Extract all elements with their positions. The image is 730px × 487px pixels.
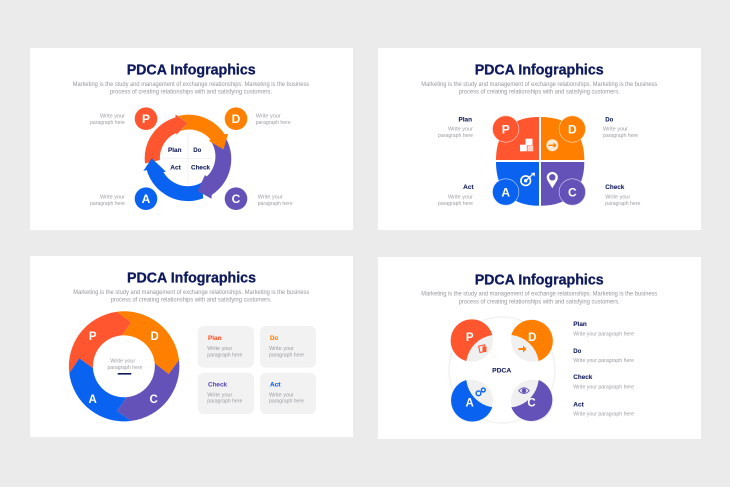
card: plan [198, 326, 254, 368]
petal: act [451, 380, 493, 422]
card: act [260, 373, 316, 414]
ring of four arrows [143, 114, 231, 201]
badge: P: P [142, 112, 150, 126]
card: plan: paragraph here [207, 352, 242, 358]
icon: eye [519, 388, 529, 394]
icon: gears [476, 388, 485, 396]
list item: plan: Write your paragraph here [573, 331, 634, 337]
text: act note: paragraph here [90, 201, 125, 207]
petal: check [511, 380, 553, 422]
petal: do: D [528, 332, 536, 344]
intro text [421, 291, 657, 305]
badge: D: D [568, 122, 577, 136]
donut segment: act [69, 358, 131, 421]
card: plan: Write your [207, 346, 232, 352]
badge: C [559, 179, 586, 205]
petal: plan: P [466, 332, 474, 344]
text: act note: Write your [100, 195, 125, 201]
panel: four petals around PDCA [378, 257, 701, 439]
icon: arrow [518, 346, 526, 352]
centre label: PDCA [492, 367, 512, 374]
list item: act: Write your paragraph here [573, 411, 634, 417]
intro text: process of creating relationships with and satisfying customers. [459, 88, 620, 95]
text: plan note [90, 114, 125, 126]
inner labels: Do [193, 147, 201, 154]
text: check note: Write your [258, 195, 283, 201]
text: do note [256, 113, 291, 126]
badge: P [492, 116, 519, 142]
badge: D [225, 107, 247, 130]
panel: circular arrows cycle [30, 48, 353, 230]
heading: PDCA Infographics [475, 62, 604, 79]
heading: PDCA Infographics [127, 62, 256, 79]
icon: target [521, 173, 535, 186]
label: check: Write your [605, 195, 630, 201]
donut letters: C [150, 394, 158, 406]
icon: documents [479, 345, 486, 352]
icon: location pin [547, 172, 558, 188]
list item: plan [573, 321, 634, 337]
badge: C [225, 187, 247, 210]
label: act [438, 184, 475, 207]
text: do note: Write your [256, 113, 281, 119]
label: act: paragraph here [438, 201, 473, 207]
card: plan: Plan [208, 335, 222, 342]
list item: do: Write your paragraph here [573, 358, 634, 364]
label: do [603, 116, 638, 139]
intro text [73, 81, 309, 95]
list item: do: Do [573, 348, 581, 355]
badge: D [559, 116, 586, 142]
intro text: Marketing is the study and management of exchange relationships. Marketing is the business [421, 81, 657, 88]
card: do [260, 326, 316, 368]
quadrant: plan [496, 117, 539, 160]
intro text: process of creating relationships with and satisfying customers. [459, 298, 620, 305]
petal: plan [451, 319, 493, 362]
list item: act: Act [573, 401, 585, 408]
label: act: Write your [448, 195, 473, 201]
intro text: process of creating relationships with and satisfying customers. [111, 296, 272, 303]
badge: C: C [568, 185, 577, 199]
intro text: Marketing is the study and management of exchange relationships. Marketing is the business [73, 81, 309, 88]
intro text: Marketing is the study and management of exchange relationships. Marketing is the business [73, 289, 309, 296]
list item: do [573, 348, 634, 364]
card: act: Write your [269, 392, 294, 398]
inner labels: Act [170, 165, 182, 172]
donut centre note [108, 359, 142, 375]
badge: C: C [232, 192, 241, 206]
donut segment: do [117, 311, 179, 374]
badge: A: A [501, 185, 510, 199]
panel: four quadrant rounded square [378, 48, 701, 230]
petal: do [511, 319, 554, 362]
donut segment: plan [69, 312, 131, 373]
label: plan: Write your [448, 127, 473, 133]
icon: arrow in circle [546, 139, 558, 151]
donut centre note: paragraph here [108, 365, 142, 371]
list item: check: Write your paragraph here [573, 384, 634, 390]
text: check note [258, 195, 293, 207]
badge: P: P [502, 122, 510, 136]
outer ring [449, 317, 555, 423]
label: check: Check [605, 184, 625, 191]
badge: A [135, 187, 157, 210]
list item: check [573, 374, 634, 390]
label: act: Act [463, 184, 475, 191]
inner labels [168, 147, 210, 172]
card: check: Check [208, 381, 227, 388]
label: do: Do [605, 116, 613, 124]
card: check: paragraph here [207, 399, 242, 405]
intro text [421, 81, 657, 95]
donut segment: check [117, 360, 179, 421]
donut letters: A [89, 394, 97, 406]
label: check: paragraph here [605, 201, 640, 207]
heading: PDCA Infographics [475, 271, 604, 288]
label: plan [438, 116, 473, 139]
badge: P [135, 107, 157, 130]
badge: A: A [142, 192, 151, 206]
intro text: Marketing is the study and management of exchange relationships. Marketing is the business [421, 291, 657, 298]
badge: A [492, 179, 519, 205]
card: do: paragraph here [269, 352, 304, 358]
quadrant: do [541, 117, 584, 160]
list item: check: Check [573, 374, 593, 381]
inner labels: Plan [168, 147, 182, 154]
inner quadrant dividers [163, 133, 213, 183]
list item: act [573, 401, 634, 417]
card: do: Do [270, 335, 278, 342]
label: do: Write your [603, 127, 628, 133]
quadrant: act [496, 162, 539, 206]
panel: donut with cards [30, 256, 353, 437]
label: check [605, 184, 640, 207]
text: do note: paragraph here [256, 120, 291, 126]
label: do: paragraph here [603, 133, 638, 139]
heading: PDCA Infographics [127, 270, 256, 287]
donut letters: D [151, 331, 159, 343]
text: plan note: paragraph here [90, 120, 125, 126]
petal: act: A [466, 397, 474, 409]
card: act: paragraph here [269, 399, 304, 405]
label: plan: Plan [458, 116, 472, 124]
intro text: process of creating relationships with and satisfying customers. [110, 88, 272, 95]
donut letters [89, 331, 159, 406]
text: plan note: Write your [100, 114, 125, 120]
card: do: Write your [269, 346, 294, 352]
text: act note [90, 195, 125, 207]
badge: D: D [232, 112, 241, 126]
quadrant: check [541, 162, 584, 206]
label: plan: paragraph here [438, 133, 473, 139]
icon: puzzle [520, 139, 533, 151]
petal: check: C [527, 398, 536, 410]
card: act: Act [270, 381, 281, 388]
donut centre note: Write your [110, 359, 135, 365]
text: check note: paragraph here [258, 201, 293, 207]
list item: plan: Plan [573, 321, 587, 328]
donut letters: P [89, 331, 97, 343]
inner labels: Check [191, 165, 210, 172]
card: check [198, 373, 254, 414]
card: check: Write your [207, 392, 232, 398]
intro text [73, 289, 309, 303]
